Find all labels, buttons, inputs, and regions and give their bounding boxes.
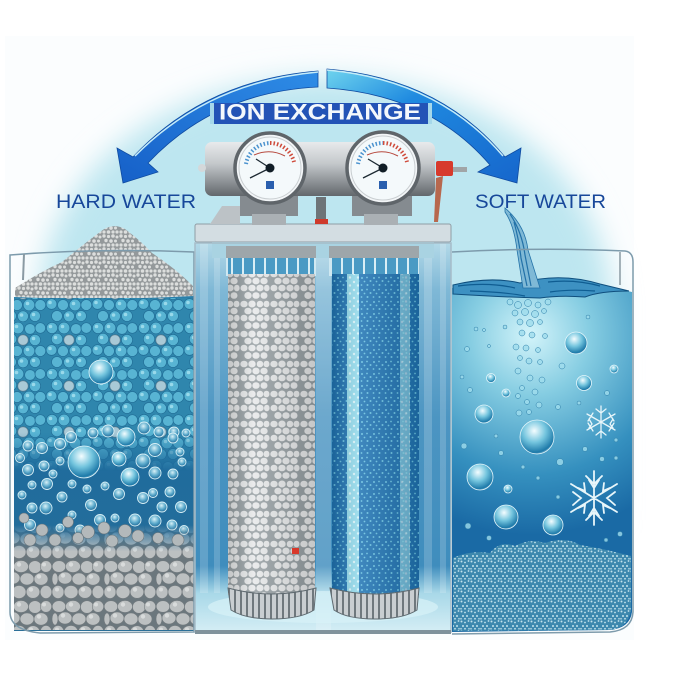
arrow: soft water direction [327,69,521,183]
base cap [330,588,419,619]
top plate [195,224,451,242]
background halo [38,78,612,520]
column: resin gravel [226,246,316,619]
soft water body [452,282,632,632]
label: soft water: SOFT WATER [475,192,606,213]
silver manifold [205,142,435,196]
gauge: right [347,132,419,204]
tank glass [452,249,633,634]
gauge: left [235,133,305,203]
glass housing [195,243,451,632]
transition pebbles [19,513,184,547]
pipe fittings [210,196,412,225]
panel: hard water tank [10,226,194,633]
base cap [228,588,316,619]
bubble plume [460,299,622,542]
floor highlight [208,591,438,623]
background panel [5,36,634,640]
tank glass [10,251,194,633]
sediment bed [453,540,631,631]
large bubbles [68,360,139,486]
arrow: hard water direction [117,71,318,183]
salt pile [15,226,193,298]
panel: control head [198,132,467,225]
label: hard water: HARD WATER [56,192,196,213]
water surface [453,278,629,298]
column: blue resin [329,246,419,619]
icon: large snowflake [571,471,617,525]
pouring stream [505,208,540,288]
red valve [434,161,467,222]
title banner: ION EXCHANGE [219,100,421,124]
scattered bubbles [16,422,190,535]
pebble bed [14,525,194,630]
large bubbles [467,332,618,535]
icon: small snowflake [587,406,615,438]
housing frame [195,243,451,632]
panel: soft water tank [452,208,633,634]
panel: ion exchange unit [195,224,451,634]
ion beads [14,298,194,473]
hard water body [14,296,194,631]
